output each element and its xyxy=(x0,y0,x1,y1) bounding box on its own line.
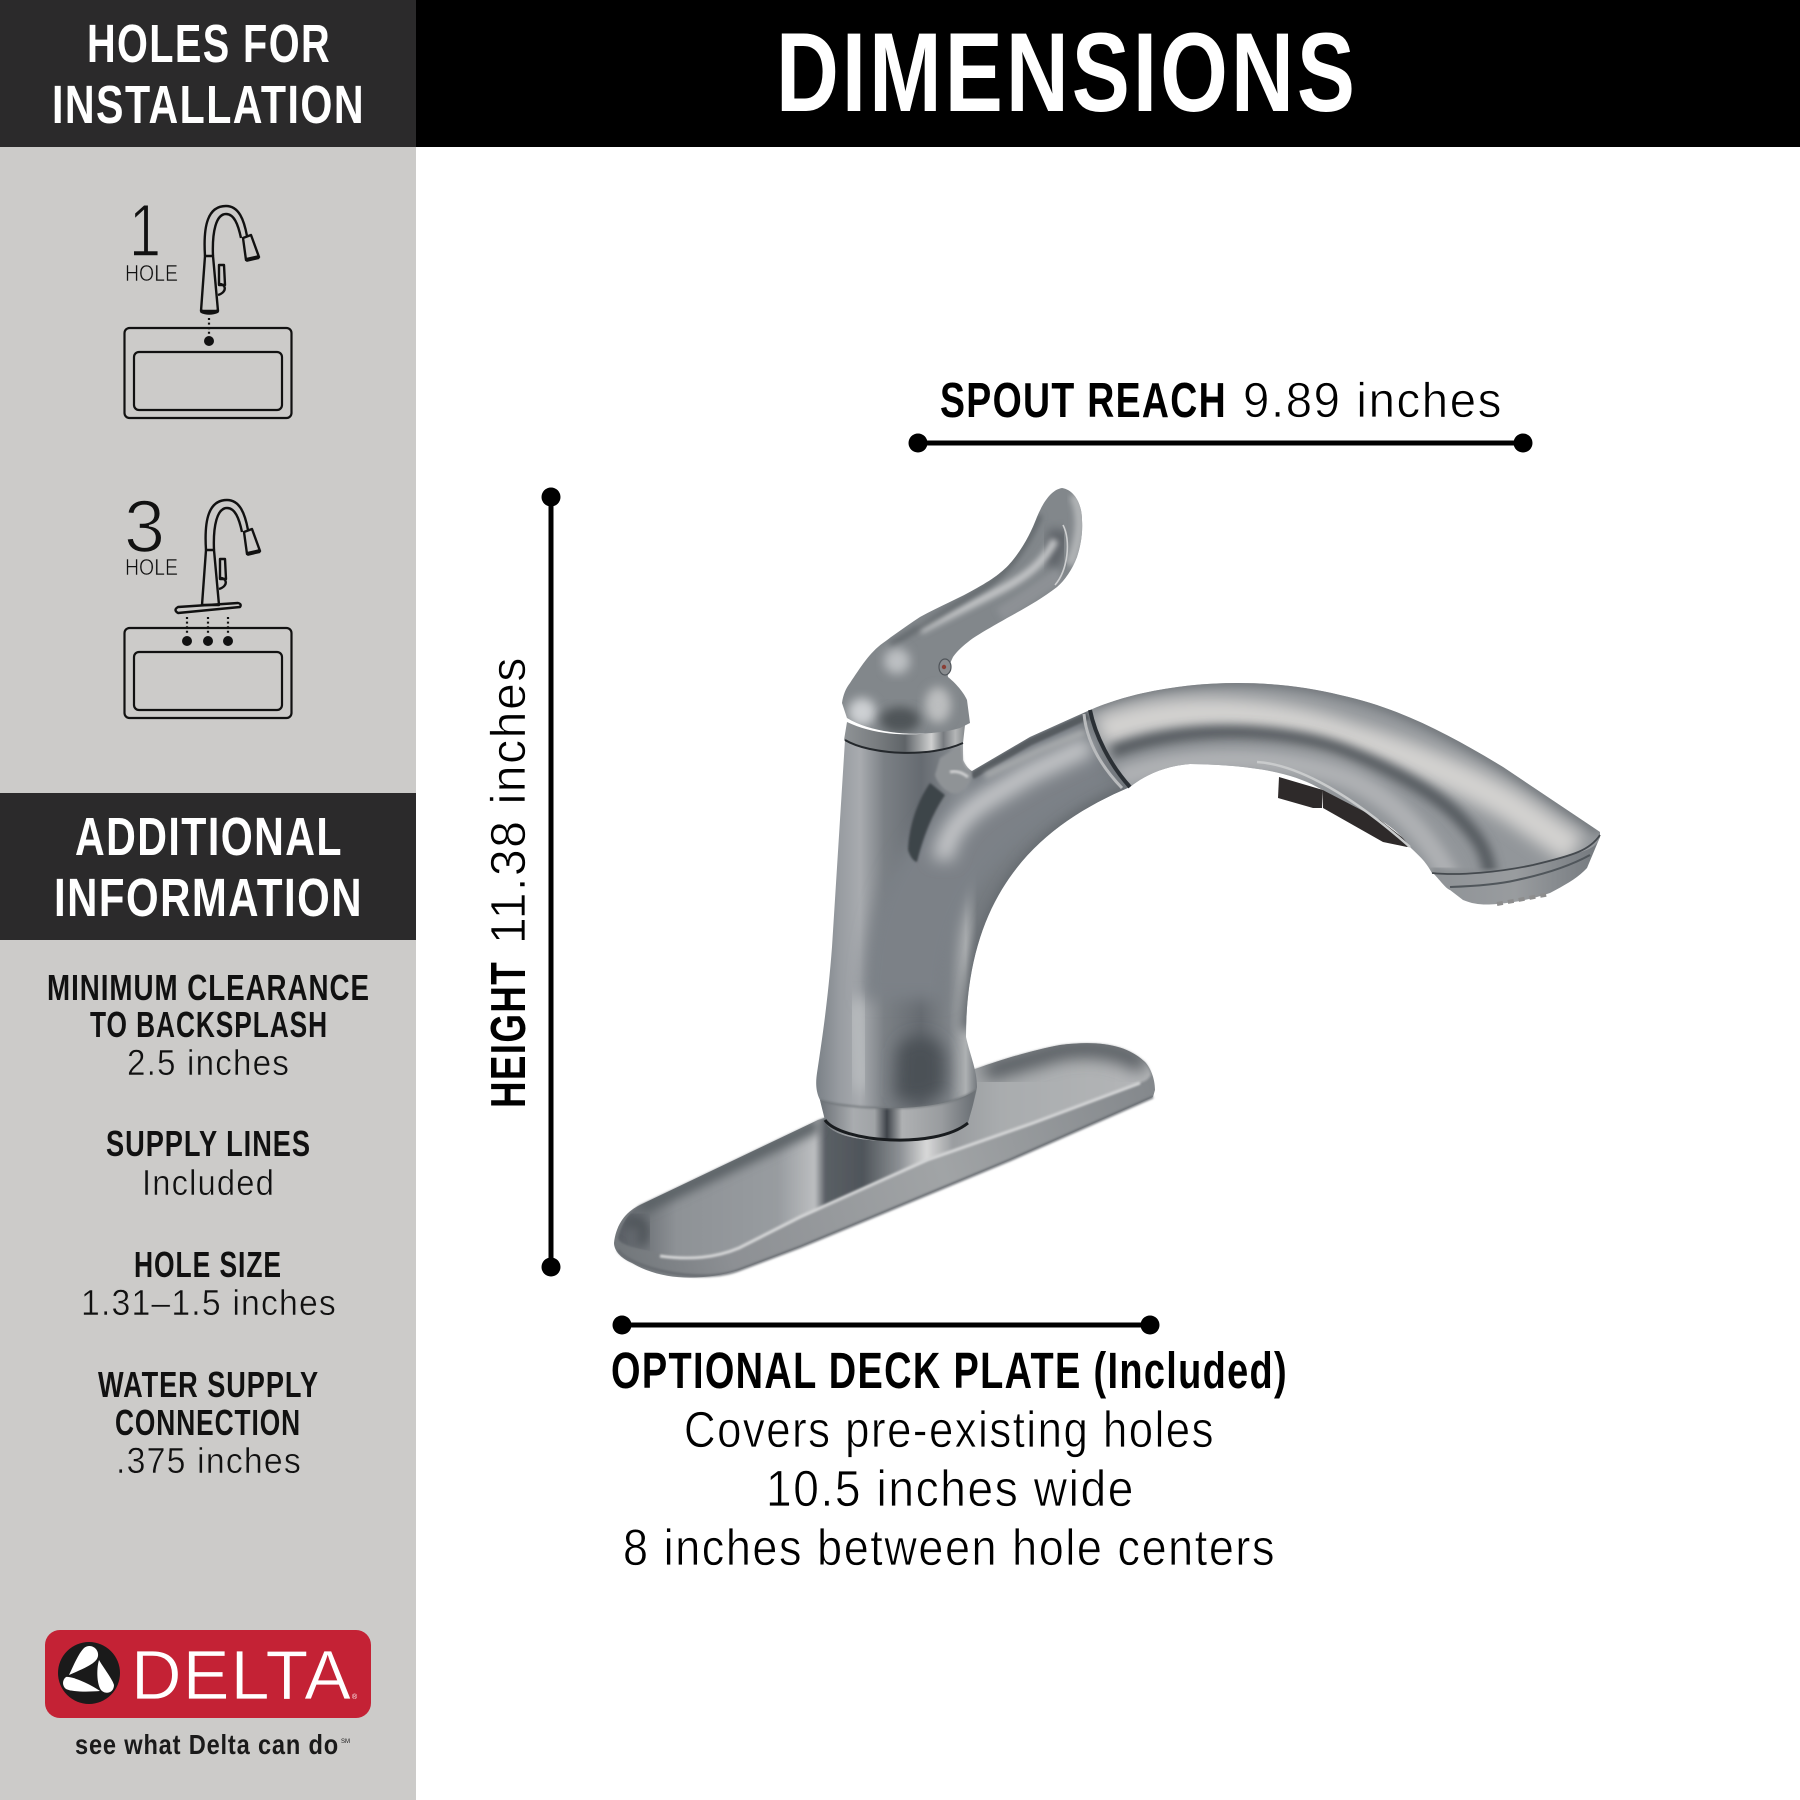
handle xyxy=(842,488,1082,734)
label: 1 hole: 1 xyxy=(129,189,161,272)
text block: water supply connection: .375 inches xyxy=(116,1440,302,1481)
logo: delta xyxy=(45,1630,371,1718)
text block: minimum clearance xyxy=(47,967,370,1083)
spray head nozzle xyxy=(1432,837,1600,905)
text block: optional deck plate xyxy=(611,1342,1288,1576)
text block: hole size xyxy=(81,1244,337,1323)
heading: holes for installation: HOLES FOR xyxy=(87,14,331,74)
text block: water supply connection: WATER SUPPLY xyxy=(98,1364,319,1405)
label: 3 hole: 3 xyxy=(124,485,165,568)
title: dimensions xyxy=(416,0,1800,147)
product: faucet xyxy=(614,488,1600,1278)
logo tagline: see what Delta can do xyxy=(75,1729,339,1760)
text block: supply lines: SUPPLY LINES xyxy=(106,1123,311,1164)
heading: holes for installation xyxy=(0,0,416,147)
callout: height: HEIGHT xyxy=(482,961,536,1108)
panel: sidebar xyxy=(0,0,416,1800)
text block: water supply connection: CONNECTION xyxy=(115,1402,301,1443)
spray head xyxy=(1084,680,1600,878)
text block: minimum clearance: 2.5 inches xyxy=(127,1042,290,1083)
heading: additional information: INFORMATION xyxy=(54,868,363,928)
icon: one hole faucet xyxy=(201,206,259,313)
text block: hole size: 1.31–1.5 inches xyxy=(81,1282,337,1323)
logo tagline: SM xyxy=(341,1739,350,1745)
icon: three hole faucet xyxy=(176,500,260,613)
callout: deck plate line xyxy=(612,1316,1160,1334)
callout: height xyxy=(482,488,560,1276)
logo: delta: ® xyxy=(352,1693,358,1701)
callout: spout reach: SPOUT REACH xyxy=(940,374,1227,428)
body and arm xyxy=(816,710,1130,1150)
text block: minimum clearance: MINIMUM CLEARANCE xyxy=(47,967,370,1008)
icon: one hole sink xyxy=(124,318,292,418)
text block: minimum clearance: TO BACKSPLASH xyxy=(90,1004,328,1045)
text block: supply lines xyxy=(106,1123,311,1203)
spray trigger xyxy=(1278,777,1412,847)
label: 1 hole: HOLE xyxy=(125,260,178,286)
text block: supply lines: Included xyxy=(142,1162,275,1203)
icon: three hole sink xyxy=(124,617,292,718)
collar xyxy=(844,722,965,754)
label: 3 hole xyxy=(124,485,178,580)
deck plate xyxy=(614,1043,1155,1278)
text block: optional deck plate: 8 inches between hole centers xyxy=(623,1519,1276,1576)
text block: optional deck plate: Covers pre-existing holes xyxy=(684,1401,1215,1458)
text block: water supply connection xyxy=(98,1364,319,1481)
heading: additional information: ADDITIONAL xyxy=(75,807,343,867)
text block: hole size: HOLE SIZE xyxy=(134,1244,282,1285)
logo: delta: DELTA xyxy=(131,1636,351,1714)
callout: height: 11.38 inches xyxy=(482,656,536,944)
callout: spout reach xyxy=(908,374,1532,452)
callout: spout reach: 9.89 inches xyxy=(1243,374,1503,428)
text block: optional deck plate: 10.5 inches wide xyxy=(766,1460,1135,1517)
label: 1 hole xyxy=(125,189,178,286)
label: 3 hole: HOLE xyxy=(125,554,178,580)
text block: optional deck plate: OPTIONAL DECK PLATE (Included) xyxy=(611,1342,1288,1399)
heading: holes for installation: INSTALLATION xyxy=(52,75,365,135)
title: dimensions: DIMENSIONS xyxy=(776,10,1358,135)
heading: additional information xyxy=(0,793,416,940)
